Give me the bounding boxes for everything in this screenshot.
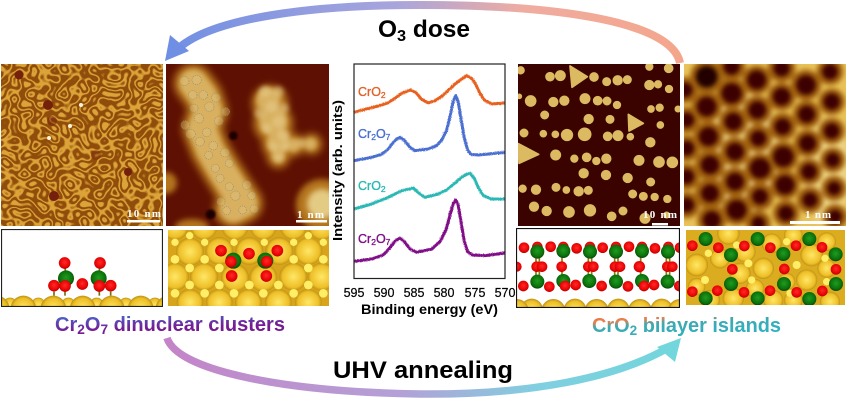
panel: STM large-scale Cr2O7 clusters [1,64,163,226]
x axis label: Binding energy (eV) [361,302,498,317]
label: CrO2 bilayer islands: CrO [592,314,631,337]
panel: XPS spectra chart [331,64,515,317]
x tick labels [344,286,515,300]
curve labels: Cr [358,127,371,141]
curve labels [358,85,391,247]
heading: O3 dose: dose [406,16,470,43]
label: Cr2O7 dinuclear clusters: 7 [100,321,108,337]
x tick labels: 590 [374,286,394,300]
curve labels: 2 [381,90,386,100]
label: Cr2O7 dinuclear clusters: dinuclear clusters [108,313,285,336]
curve labels: O [376,232,386,246]
arrow: UHV annealing, bottom curved arrow [167,338,681,394]
panel: top view of Cr2O7 model [168,230,329,306]
curve labels: 7 [386,237,391,247]
curve labels: CrO [358,85,381,99]
scale bar: 1 nm: 1 nm [297,209,324,221]
curve labels: Cr [358,232,371,246]
panel: top view of CrO2 bilayer model [686,230,845,305]
heading: O3 dose: 3 [397,28,406,45]
spectra curves [354,76,505,261]
label: Cr2O7 dinuclear clusters: Cr [55,313,78,336]
curve labels: 2 [371,237,376,247]
gold surface [168,230,329,306]
scale bar: 10 nm: 10 nm [643,209,677,221]
scale bar: 1 nm [790,211,840,224]
x tick labels: 570 [495,286,515,300]
halo of islands [193,83,322,208]
x tick labels: 580 [434,286,454,300]
scale bar: 10 nm [644,211,677,226]
gold surface [686,230,840,305]
atoms [512,241,685,292]
cluster circles [180,75,258,215]
arrow: O3 dose, top curved arrow [165,5,680,63]
panel: STM close-up CrO2 honeycomb [672,53,846,236]
x tick labels: 595 [344,286,364,300]
sticks [536,252,670,282]
panel: STM close-up Cr2O7 clusters [166,64,329,226]
atoms [48,257,116,296]
scale bar: 10 nm [127,210,161,222]
edge islands [166,168,329,226]
scale bar: 10 nm: 10 nm [127,208,161,220]
bright tops of islands [193,83,317,208]
panel: side view of Cr2O7 model [1,229,163,307]
heading: UHV annealing: UHV annealing [333,357,513,384]
label: Cr2O7 dinuclear clusters: 2 [77,321,85,337]
curve labels: O [376,127,386,141]
label: CrO2 bilayer islands: 2 [630,322,637,338]
label: CrO2 bilayer islands: bilayer islands [637,314,781,337]
x tick labels: 575 [465,286,485,300]
scale bar: 1 nm: 1 nm [805,209,831,221]
label: Cr2O7 dinuclear clusters: O [85,313,101,336]
curve labels: CrO [358,179,381,193]
panel: STM large-scale CrO2 islands [517,63,681,226]
atoms [215,245,283,282]
curve labels: 2 [381,184,386,194]
chart frame [354,64,505,278]
heading: O3 dose: O [378,16,397,43]
bright edge island top [307,189,337,219]
x tick labels: 585 [404,286,424,300]
dark pits [206,131,238,219]
gold surface [2,296,162,306]
scale bar: 1 nm [296,211,327,222]
y axis label: Intensity (arb. units) [331,100,345,241]
gold surface [517,298,679,307]
curve labels: 2 [371,132,376,142]
panel: side view of CrO2 bilayer model [516,228,680,308]
atoms [687,232,843,306]
curve labels: 7 [386,132,391,142]
